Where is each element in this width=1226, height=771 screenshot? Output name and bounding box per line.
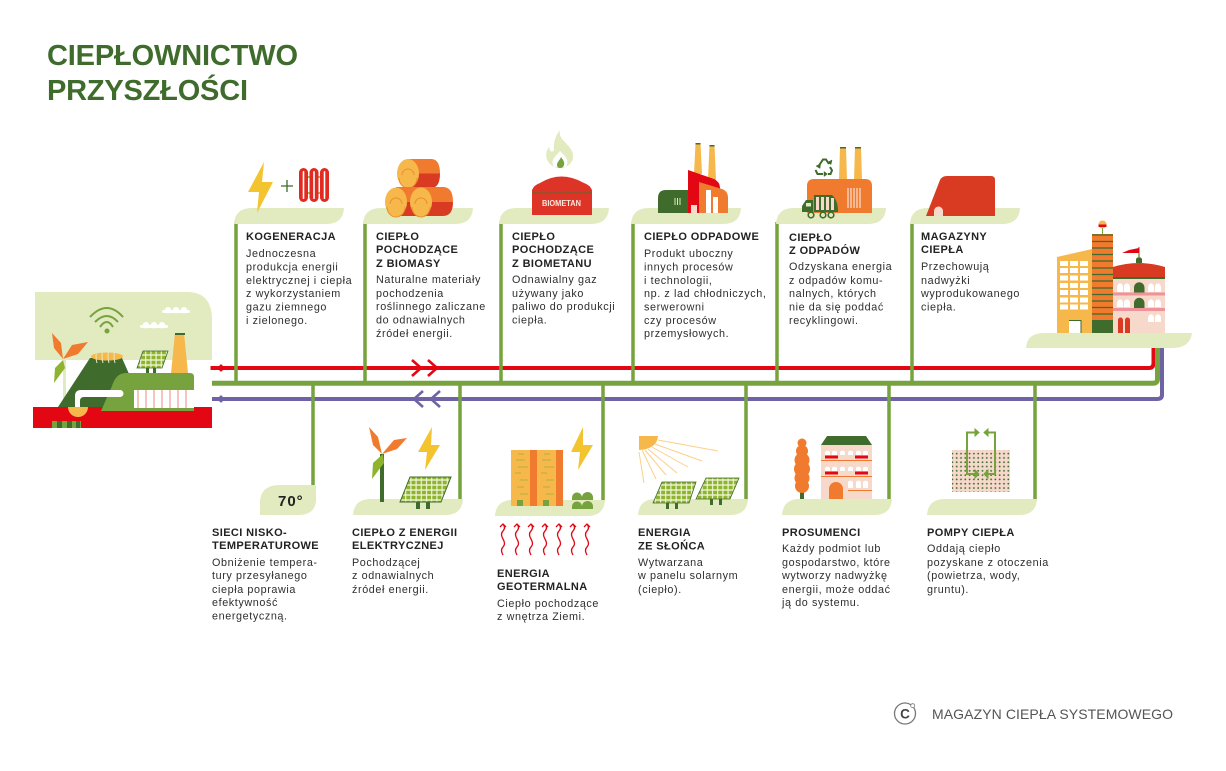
icon: recycling	[816, 160, 832, 176]
title: PRZYSZŁOŚCI	[47, 73, 248, 107]
panel: prosumenci: wytworzy nadwyżkę	[781, 570, 888, 582]
panel: kogeneracja: i zielonego.	[246, 315, 308, 327]
panel: kogeneracja	[234, 162, 352, 327]
panel: biomasa: do odnawialnych	[376, 314, 465, 326]
panel: ciepło z odpadów: Z ODPADÓW	[789, 244, 860, 257]
panel: ciepło z energii elektrycznej: z odnawialnych	[352, 570, 434, 582]
panel: energia ze słońca: Wytwarzana	[638, 557, 703, 569]
panel: biometan: BIOMETAN	[542, 198, 581, 208]
panel: biometan: ciepła.	[512, 314, 547, 326]
panel: biometan: POCHODZĄCE	[512, 244, 594, 256]
panel: biomasa: CIEPŁO	[376, 231, 419, 243]
panel: sieci niskotemperaturowe: efektywność	[212, 597, 278, 609]
panel: ciepło z odpadów: z odpadów komu-	[789, 275, 883, 287]
panel: ciepło z odpadów: CIEPŁO	[789, 232, 832, 244]
panel: pompy ciepła: pozyskane z otoczenia	[927, 557, 1049, 569]
panel: sieci niskotemperaturowe: 70°	[278, 493, 304, 510]
panel: biomasa: pochodzenia	[376, 288, 444, 300]
panel: ciepło odpadowe: serwerowni	[644, 302, 705, 314]
title	[47, 40, 298, 107]
panel: biomasa: źródeł energii.	[376, 328, 453, 340]
icon: heat waves	[500, 524, 590, 555]
panel: biometan: paliwo do produkcji	[512, 301, 615, 313]
footer: publisher logo and name	[894, 703, 1173, 724]
panel: prosumenci: ją do systemu.	[781, 597, 860, 609]
panel: pompy ciepła: (powietrza, wody,	[927, 570, 1020, 582]
panel: ciepło z energii elektrycznej: źródeł energii.	[352, 584, 429, 596]
icon: clouds	[140, 307, 190, 328]
panel: ciepło z energii elektrycznej: Pochodzącej	[352, 557, 420, 569]
icon: wifi	[90, 308, 123, 334]
panel: energia ze słońca: ENERGIA	[638, 527, 691, 539]
panel: biometan: używany jako	[512, 288, 584, 300]
panel: prosumenci: gospodarstwo, które	[782, 557, 891, 569]
panel: sieci niskotemperaturowe: SIECI NISKO-	[212, 527, 287, 539]
panel: ciepło z odpadów: nalnych, których	[789, 288, 877, 300]
panel: kogeneracja: KOGENERACJA	[246, 231, 336, 243]
panel: ciepło odpadowe: innych procesów	[644, 262, 733, 274]
panel: energia geotermalna: ENERGIA	[497, 568, 550, 580]
icon: garbage truck	[802, 195, 838, 218]
panel: biomasa: Naturalne materiały	[376, 274, 481, 286]
panel: magazyny ciepła: nadwyżki	[921, 275, 970, 287]
panel: pompy ciepła	[927, 429, 1049, 596]
panel: energia ze słońca: ZE SŁOŃCA	[638, 540, 705, 552]
panel: ciepło odpadowe	[631, 143, 766, 340]
panel: magazyny ciepła: Przechowują	[921, 261, 989, 273]
panel: ciepło odpadowe: i technologii,	[644, 275, 712, 287]
panel: magazyny ciepła: CIEPŁA	[921, 244, 964, 256]
panel: pompy ciepła: POMPY CIEPŁA	[927, 527, 1015, 539]
panel: sieci niskotemperaturowe: tury przesyłanego	[212, 570, 307, 582]
illustration: heat plant source	[33, 292, 212, 428]
panel: kogeneracja: gazu ziemnego	[246, 302, 327, 314]
panel: energia geotermalna	[495, 427, 605, 623]
panel: biometan: Odnawialny gaz	[512, 274, 597, 286]
panel: magazyny ciepła: ciepła.	[921, 302, 956, 314]
illustration: city buildings	[1026, 220, 1192, 348]
pipeline: supply, main and return lines	[210, 345, 1162, 407]
title: CIEPŁOWNICTWO	[47, 40, 298, 72]
panel: kogeneracja: elektrycznej i ciepła	[246, 275, 352, 287]
panel: prosumenci	[781, 436, 892, 609]
panel: ciepło z energii elektrycznej: ELEKTRYCZNEJ	[352, 540, 444, 552]
panel: prosumenci: energii, może oddać	[782, 584, 891, 596]
panel: sieci niskotemperaturowe: ciepła poprawia	[212, 584, 296, 596]
panel: biometan: CIEPŁO	[512, 231, 555, 243]
panel: ciepło z energii elektrycznej: CIEPŁO Z ENERGII	[352, 527, 457, 539]
panel: energia geotermalna: GEOTERMALNA	[497, 581, 588, 593]
footer: publisher logo and name: MAGAZYN CIEPŁA SYSTEMOWEGO	[932, 706, 1173, 722]
panel: sieci niskotemperaturowe: TEMPERATUROWE	[212, 540, 319, 552]
panel: magazyny ciepła: wyprodukowanego	[920, 288, 1020, 300]
panel: magazyny ciepła	[910, 176, 1020, 314]
panel: prosumenci: PROSUMENCI	[782, 527, 861, 539]
panel: ciepło z odpadów: recyklingowi.	[789, 315, 859, 327]
panel: magazyny ciepła: MAGAZYNY	[921, 231, 987, 243]
panel: ciepło z odpadów	[776, 147, 892, 327]
panel: ciepło odpadowe: Produkt uboczny	[644, 248, 733, 260]
connectors to the pipeline	[236, 222, 1035, 501]
panel: ciepło odpadowe: czy procesów	[644, 315, 717, 327]
panel: ciepło z odpadów: nie da się poddać	[789, 302, 884, 314]
panel: energia ze słońca: (ciepło).	[638, 584, 682, 596]
panel: ciepło odpadowe: np. z lad chłodniczych,	[644, 288, 766, 300]
panel: ciepło z odpadów: Odzyskana energia	[789, 261, 892, 273]
panel: biometan: Z BIOMETANU	[512, 258, 592, 270]
panel: kogeneracja: Jednoczesna	[246, 248, 316, 260]
panel: ciepło z energii elektrycznej	[352, 427, 463, 596]
panel: biomasa	[363, 159, 486, 340]
panel: ciepło odpadowe: CIEPŁO ODPADOWE	[644, 231, 759, 243]
panel: energia geotermalna: z wnętrza Ziemi.	[497, 611, 585, 623]
panel: sieci niskotemperaturowe	[212, 485, 319, 622]
panel: ciepło odpadowe: przemysłowych.	[644, 328, 729, 340]
panel: biomasa: Z BIOMASY	[376, 258, 441, 270]
panel: kogeneracja: z wykorzystaniem	[246, 288, 341, 300]
panel: energia geotermalna: Ciepło pochodzące	[497, 598, 599, 610]
panel: kogeneracja: produkcja energii	[246, 262, 338, 274]
panel: pompy ciepła: gruntu).	[927, 584, 969, 596]
panel: energia ze słońca: w panelu solarnym	[637, 570, 738, 582]
panel: energia ze słońca	[637, 436, 748, 596]
panel: pompy ciepła: Oddają ciepło	[927, 543, 1001, 555]
panel: biomasa: roślinnego zaliczane	[376, 301, 486, 313]
panel: biomasa: POCHODZĄCE	[376, 244, 458, 256]
panel: prosumenci: Każdy podmiot lub	[782, 543, 881, 555]
panel: biometan	[499, 130, 615, 326]
footer: publisher logo and name: C	[900, 706, 910, 722]
panel: sieci niskotemperaturowe: energetyczną.	[212, 610, 288, 622]
panel: sieci niskotemperaturowe: Obniżenie tempera-	[212, 557, 318, 569]
